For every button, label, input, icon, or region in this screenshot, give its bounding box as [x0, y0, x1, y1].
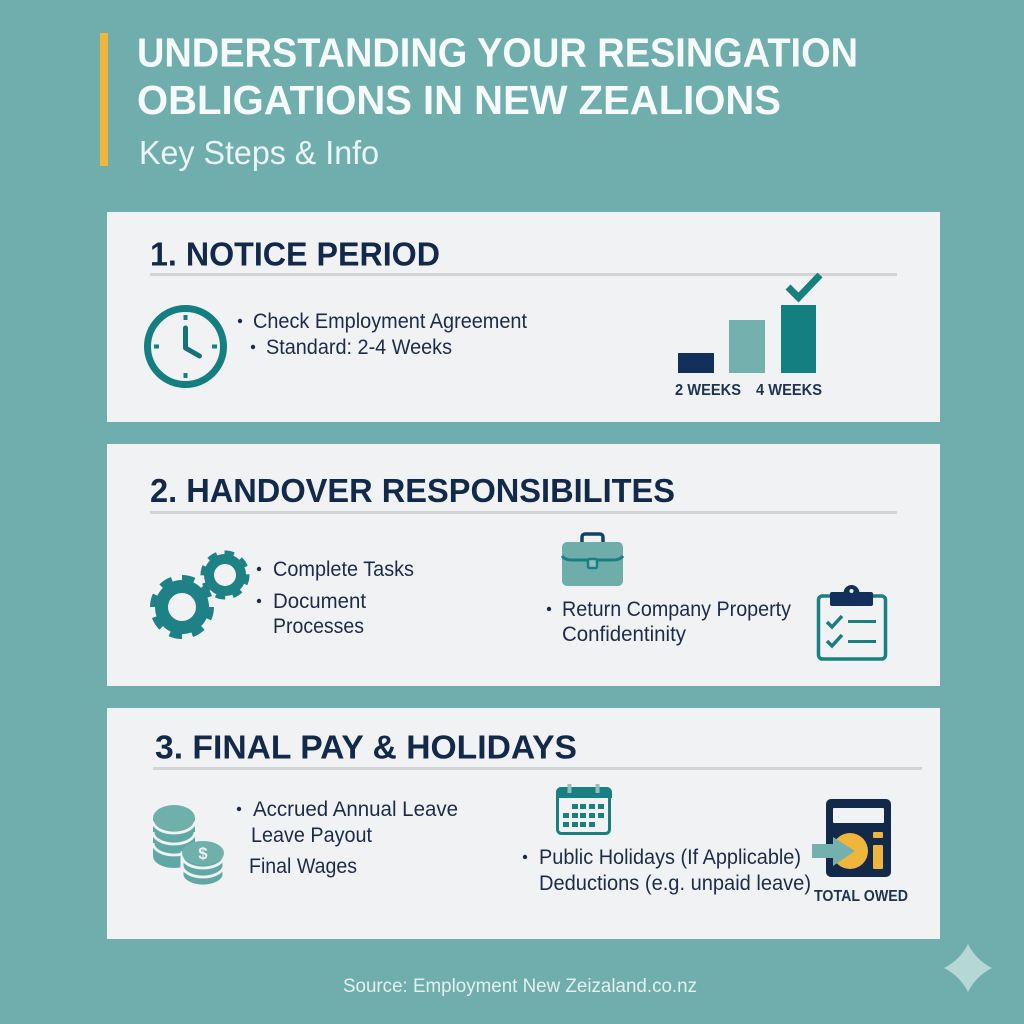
icon: gears — [154, 554, 246, 634]
source footer: Source: Employment New Zeizaland.co.nz — [343, 976, 697, 997]
title: UNDERSTANDING YOUR RESINGATION — [137, 30, 858, 76]
text: handover tasks: Complete Tasks — [273, 558, 414, 581]
text: handover tasks: Processes — [273, 615, 364, 638]
bar chart: notice weeks: 4 WEEKS — [756, 382, 822, 399]
text: handover tasks — [257, 558, 414, 638]
panel: final pay and holidays — [107, 708, 940, 939]
text: leave and wages — [237, 798, 458, 878]
bar chart: notice weeks — [675, 275, 822, 399]
text: leave and wages: Accrued Annual Leave — [253, 798, 458, 821]
text: holidays and deductions: Public Holidays (If Applicable) — [539, 846, 801, 869]
icon: clipboard — [818, 586, 886, 659]
subtitle: Key Steps & Info — [139, 134, 379, 171]
text: holidays and deductions: Deductions (e.g. unpaid leave) — [539, 872, 811, 895]
text: property: Confidentinity — [562, 623, 686, 646]
text: handover tasks: Document — [273, 590, 366, 613]
text: property: Return Company Property — [562, 598, 791, 621]
bar chart: notice weeks: 2 WEEKS — [675, 382, 741, 399]
text: notice bullets: Check Employment Agreement — [253, 310, 527, 333]
icon: calendar — [556, 784, 612, 834]
text: holidays and deductions — [523, 846, 811, 895]
header accent bar — [100, 33, 108, 166]
panel: notice period — [107, 212, 940, 422]
panel: handover responsibilities — [107, 444, 940, 686]
text: leave and wages: Leave Payout — [251, 824, 372, 847]
title — [137, 30, 858, 123]
icon: calculator with total owed — [812, 799, 908, 905]
icon: clock — [148, 308, 224, 384]
icon: sparkle — [944, 944, 992, 992]
text: leave and wages: Final Wages — [249, 855, 357, 878]
heading: handover: 2. HANDOVER RESPONSIBILITES — [150, 472, 675, 509]
icon: coins: $ — [198, 844, 208, 863]
text: notice bullets: Standard: 2-4 Weeks — [266, 336, 452, 359]
icon: briefcase — [562, 534, 623, 586]
heading: final pay: 3. FINAL PAY & HOLIDAYS — [155, 728, 577, 766]
icon: coins — [153, 805, 224, 888]
heading: notice period: 1. NOTICE PERIOD — [150, 236, 440, 272]
icon: calculator with total owed: TOTAL OWED — [814, 888, 908, 905]
title: OBLIGATIONS IN NEW ZEALIONS — [137, 77, 781, 123]
text: notice bullets — [238, 310, 527, 359]
text: property — [547, 598, 791, 646]
